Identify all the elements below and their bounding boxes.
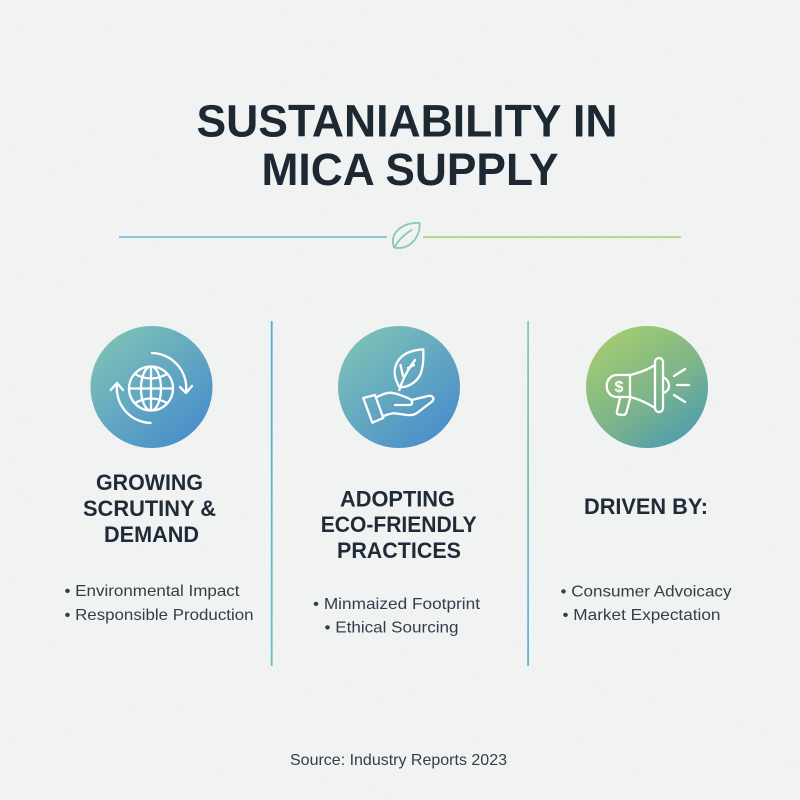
bullet list: • Responsible Production [64,607,253,624]
panel: driven by [560,326,732,624]
heading: DRIVEN BY: [584,494,708,519]
heading: ADOPTING [340,486,455,512]
heading: DEMAND [104,522,199,547]
heading [83,470,216,547]
heading: GROWING [96,470,203,495]
bullet list [64,583,253,624]
heading: SCRUTINY & [83,496,216,521]
bullet list: • Ethical Sourcing [324,620,458,636]
icon: globe with rotating arrows [90,326,212,448]
bullet list: • Environmental Impact [64,583,240,600]
icon: leaf [393,223,420,248]
bullet list [313,596,481,636]
heading: ECO-FRIENDLY [321,512,477,537]
bullet list: • Consumer Advoicacy [560,584,732,600]
bullet list [560,584,732,624]
panel: adopting eco-friendly practices [313,326,481,636]
title: SUSTANIABILITY IN [196,96,618,146]
title divider with leaf [119,223,681,248]
title [196,96,618,195]
bullet list: • Market Expectation [562,607,720,624]
icon: megaphone with dollar sign [586,326,708,448]
icon: hand holding leaf [338,326,460,448]
source note: Source: Industry Reports 2023 [290,752,507,769]
panel: growing scrutiny and demand [64,326,253,624]
column dividers [271,321,529,666]
icon: megaphone with dollar sign: $ [615,379,624,396]
title: MICA SUPPLY [262,144,558,195]
heading: PRACTICES [337,538,461,563]
bullet list: • Minmaized Footprint [313,596,481,613]
heading [321,486,477,563]
